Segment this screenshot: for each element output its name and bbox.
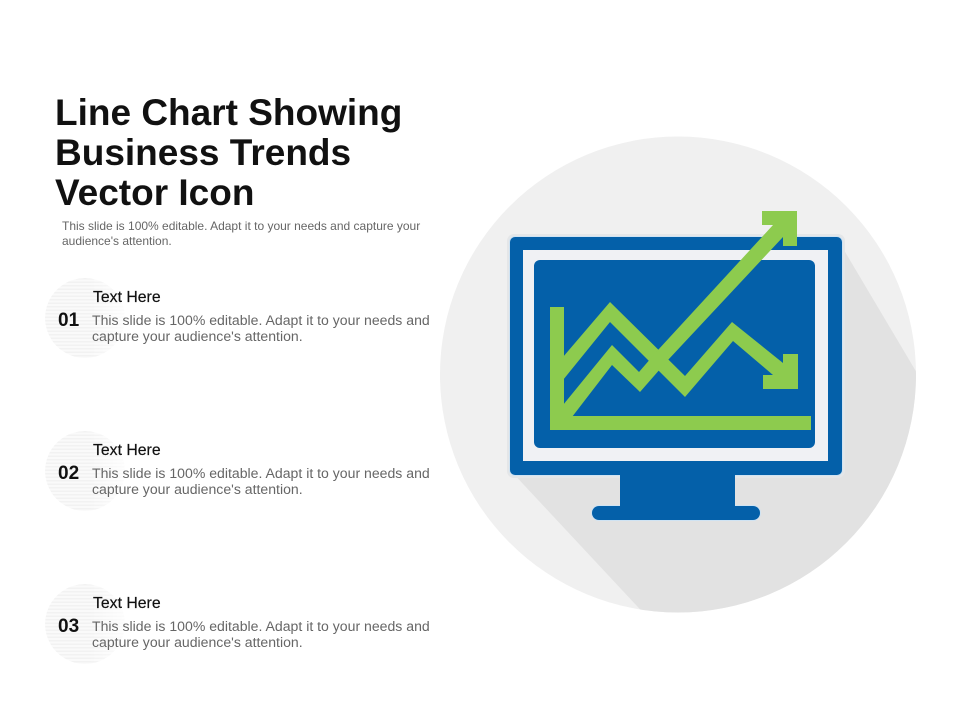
item 01 heading: Text Here <box>93 288 161 306</box>
item 02 text: This slide is 100% editable. Adapt it to your needs and <box>92 464 430 480</box>
list item 03 <box>45 584 430 662</box>
item 02 text: capture your audience's attention. <box>92 481 303 497</box>
list item 02 <box>45 431 430 510</box>
rising trend arrow <box>563 211 797 417</box>
title <box>55 92 402 213</box>
number 02: 02 <box>58 462 79 484</box>
monitor chart illustration <box>440 136 916 612</box>
number badge 02 <box>45 431 106 510</box>
title: Line Chart Showing <box>55 92 402 133</box>
item 02 heading: Text Here <box>93 442 161 458</box>
item 01 text <box>92 312 430 344</box>
item 01 text: This slide is 100% editable. Adapt it to your needs and <box>92 312 430 328</box>
chart lines and arrows <box>550 211 811 430</box>
long shadow <box>518 252 916 612</box>
item 01 text: capture your audience's attention. <box>92 328 303 344</box>
item 03 text <box>92 618 430 650</box>
falling trend arrow <box>563 302 798 397</box>
item 02 text <box>92 464 430 497</box>
background circle <box>440 136 916 612</box>
list item 01 <box>45 278 430 356</box>
subtitle text <box>62 219 420 248</box>
axes <box>550 307 811 430</box>
number badge 03 <box>45 584 106 662</box>
item 03 text: capture your audience's attention. <box>92 634 303 650</box>
subtitle text: This slide is 100% editable. Adapt it to your needs and capture your <box>62 219 420 233</box>
subtitle text: audience's attention. <box>62 234 172 248</box>
number 03: 03 <box>58 616 79 636</box>
item 03 heading: Text Here <box>93 594 161 612</box>
title: Business Trends <box>55 132 351 173</box>
item 03 text: This slide is 100% editable. Adapt it to your needs and <box>92 618 430 634</box>
title: Vector Icon <box>55 172 254 213</box>
number 01: 01 <box>58 310 79 330</box>
monitor <box>507 234 845 521</box>
number badge 01 <box>45 278 106 356</box>
